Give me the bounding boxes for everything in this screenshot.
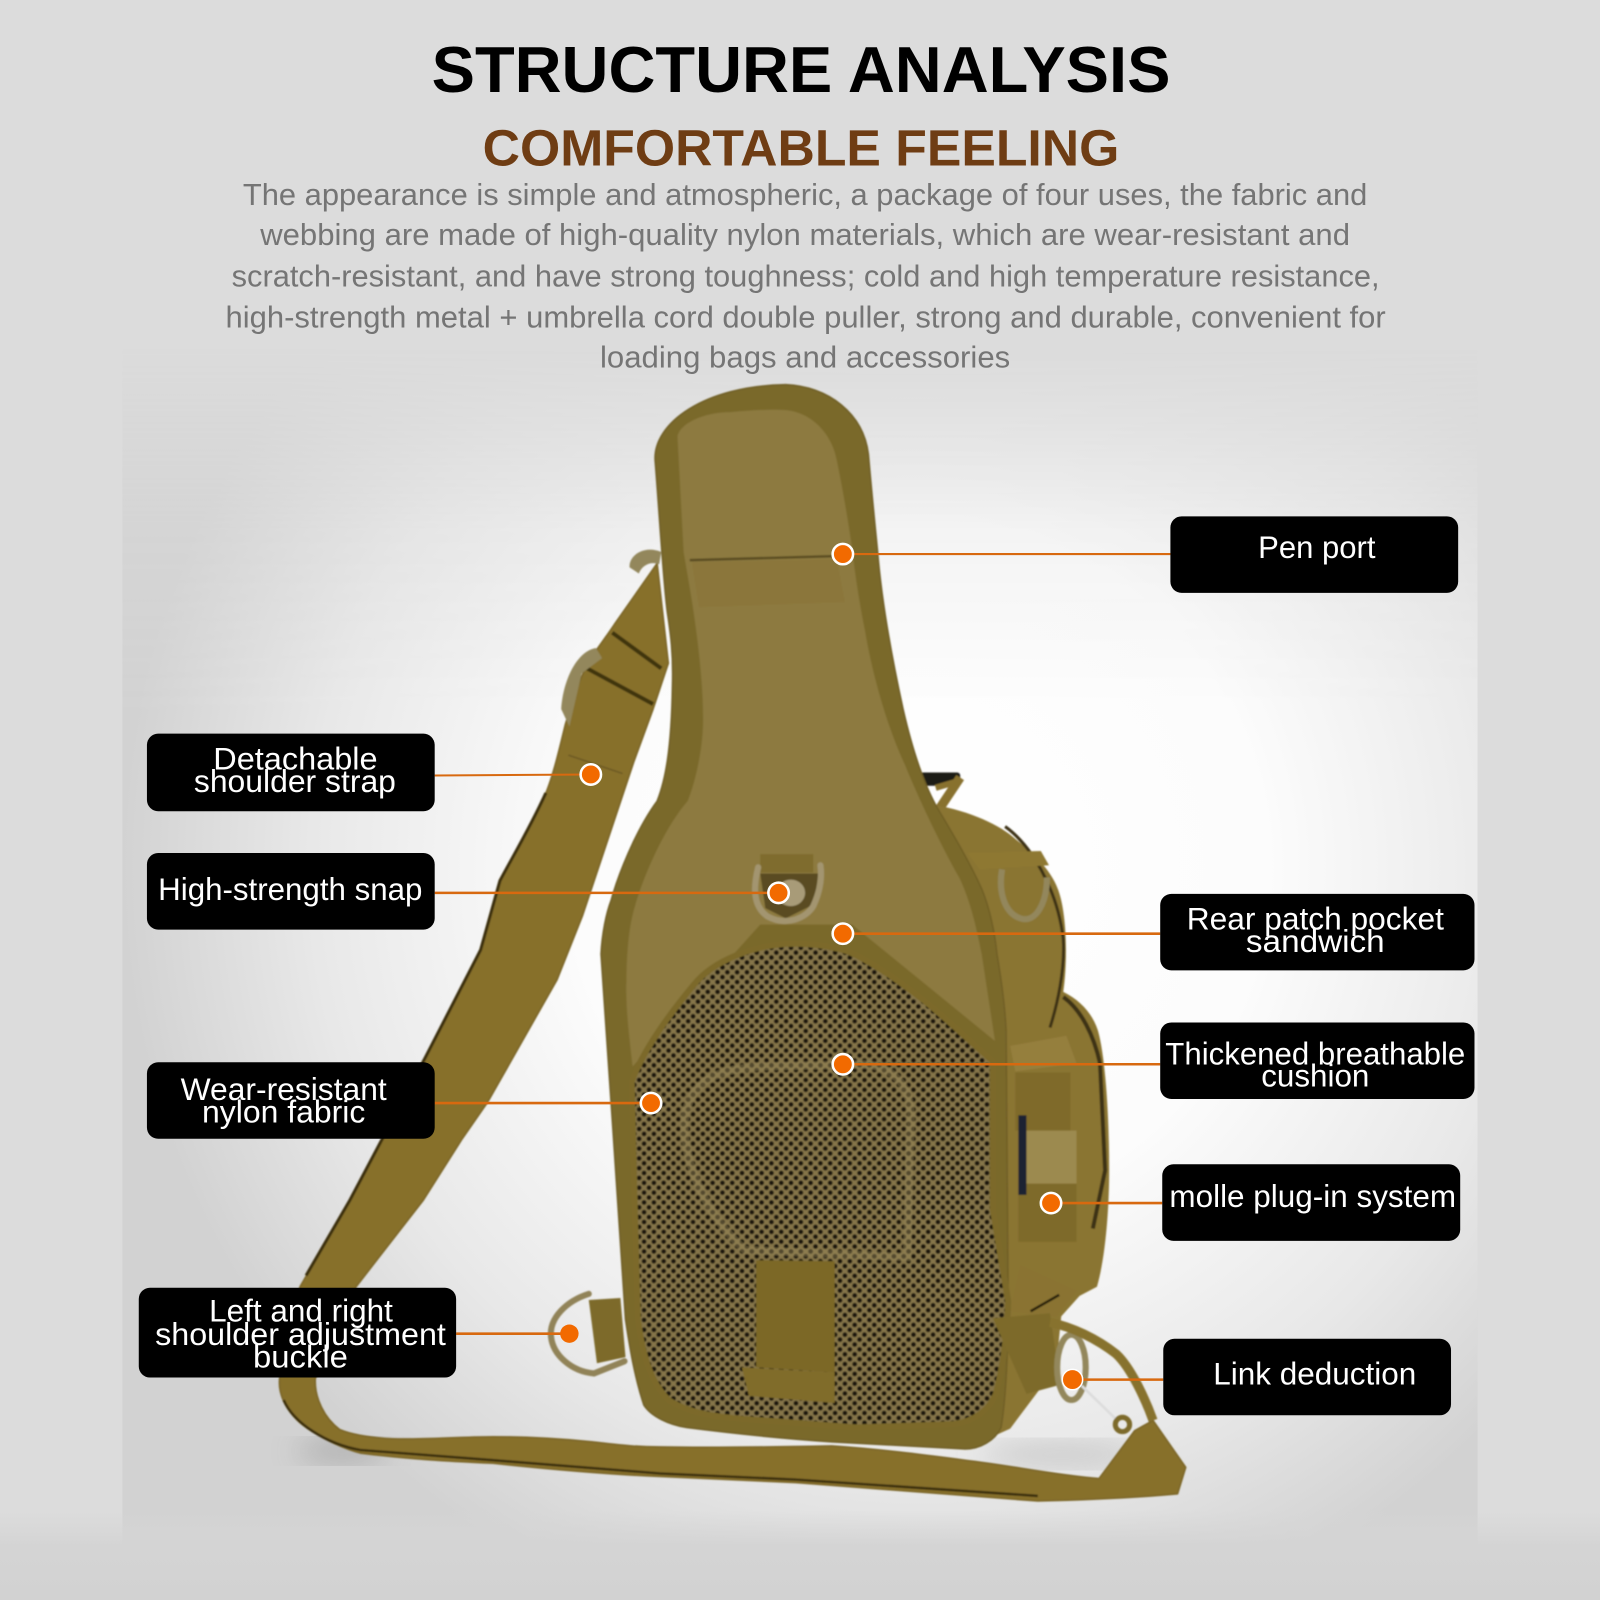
back panel outer xyxy=(601,385,1008,1449)
center d-ring xyxy=(755,854,821,921)
callout: high-strength snap: High-strength snap xyxy=(158,871,422,907)
shoulder strap xyxy=(279,563,1186,1501)
callout: wear-resistant nylon fabric: Wear-resistant xyxy=(181,1071,387,1107)
callout: wear-resistant nylon fabric: nylon fabric xyxy=(202,1093,365,1129)
callout: pen port: Pen port xyxy=(1258,529,1376,565)
sling bag illustration xyxy=(279,385,1186,1501)
callout: left and right shoulder adjustment buckle: Left and right xyxy=(209,1292,393,1328)
marker: cushion xyxy=(833,1054,853,1074)
description paragraph: The appearance is simple and atmospheric, a package of four uses, the fabric and xyxy=(243,178,1367,212)
marker: shoulder strap xyxy=(581,764,601,785)
callout: rear patch pocket sandwich: Rear patch pocket xyxy=(1187,901,1444,937)
callout: detachable shoulder strap xyxy=(147,734,435,811)
callout: link deduction: Link deduction xyxy=(1213,1356,1416,1392)
callout: left and right shoulder adjustment buckle: buckle xyxy=(253,1338,348,1374)
marker: rear pocket xyxy=(833,923,853,944)
callout: thickened breathable cushion xyxy=(1160,1022,1474,1099)
left d-ring xyxy=(551,1294,626,1373)
callout: link deduction xyxy=(1163,1339,1451,1415)
callout: left and right shoulder adjustment buckle xyxy=(139,1288,456,1378)
marker: pen port xyxy=(833,544,853,564)
callout: molle plug-in system: molle plug-in system xyxy=(1169,1178,1456,1214)
callout: rear patch pocket sandwich: sandwich xyxy=(1246,923,1385,959)
callout: detachable shoulder strap: shoulder strap xyxy=(194,763,396,799)
leader: link deduction xyxy=(1072,1378,1163,1381)
callout: molle plug-in system xyxy=(1162,1164,1460,1241)
leader: adjustment buckle xyxy=(456,1332,569,1335)
marker: link xyxy=(1062,1369,1083,1390)
mesh velcro tab xyxy=(742,1260,835,1403)
marker: snap xyxy=(768,883,789,903)
top handle clip xyxy=(919,772,960,808)
callout: left and right shoulder adjustment buckle: shoulder adjustment xyxy=(155,1316,446,1352)
background xyxy=(0,430,1600,1600)
callout: high-strength snap xyxy=(147,853,435,930)
leader: detachable shoulder strap xyxy=(435,774,591,776)
leader: nylon fabric xyxy=(435,1102,651,1104)
callout: thickened breathable cushion: Thickened breathable xyxy=(1165,1035,1465,1071)
description paragraph: loading bags and accessories xyxy=(600,340,1010,374)
back panel inner padding xyxy=(626,410,995,1066)
leader: molle system xyxy=(1051,1202,1162,1204)
callout: detachable shoulder strap: Detachable xyxy=(213,740,378,776)
description paragraph xyxy=(226,178,1386,374)
mesh cushion xyxy=(632,944,1008,1428)
callout: wear-resistant nylon fabric xyxy=(147,1062,435,1139)
rear compartments xyxy=(918,805,1109,1449)
right d-ring xyxy=(967,851,1049,919)
leader: breathable cushion xyxy=(843,1063,1160,1066)
description paragraph: webbing are made of high-quality nylon materials, which are wear-resistant and xyxy=(259,218,1350,252)
description paragraph: high-strength metal + umbrella cord double puller, strong and durable, convenient for xyxy=(226,301,1386,335)
title: STRUCTURE ANALYSIS xyxy=(432,33,1170,106)
marker: buckle xyxy=(560,1324,579,1343)
leader: rear patch pocket xyxy=(843,932,1160,935)
marker: nylon fabric xyxy=(641,1093,661,1113)
callout: pen port xyxy=(1170,516,1458,593)
callout: rear patch pocket sandwich xyxy=(1160,894,1474,970)
carabiner hardware xyxy=(993,1313,1153,1432)
marker: molle xyxy=(1041,1193,1061,1213)
strap buckles xyxy=(561,550,661,727)
leader: high-strength snap xyxy=(435,892,779,894)
description paragraph: scratch-resistant, and have strong toughness; cold and high temperature resistance, xyxy=(232,260,1380,294)
subtitle: COMFORTABLE FEELING xyxy=(483,119,1119,176)
callout: thickened breathable cushion: cushion xyxy=(1261,1058,1369,1094)
pen port seam xyxy=(690,556,845,607)
leader: pen port xyxy=(843,553,1170,555)
